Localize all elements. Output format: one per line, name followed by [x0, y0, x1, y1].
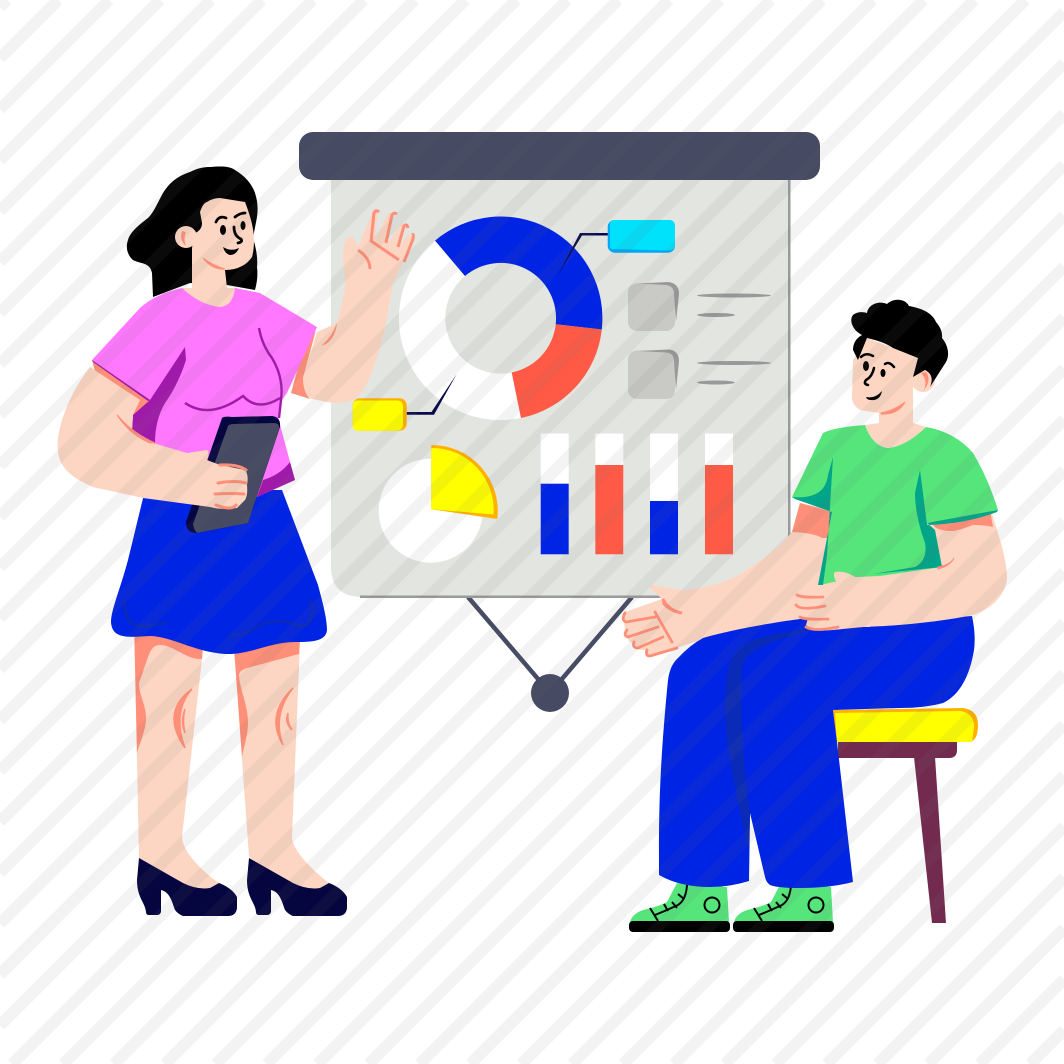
pants fold shading: [725, 630, 810, 850]
donut chart: [399, 217, 602, 420]
legend icon 1: [628, 282, 679, 331]
bar chart: [541, 434, 733, 554]
neck and face: [852, 338, 935, 448]
legs: [134, 620, 329, 892]
board screen: [331, 178, 790, 597]
callout: cyan tag: [557, 220, 675, 276]
tablet: [186, 416, 280, 533]
shoes: [629, 883, 834, 932]
callout: yellow tag: [353, 374, 457, 431]
raised arm and hand: [291, 210, 413, 403]
resting upper arm: [840, 505, 1007, 628]
face and neck: [182, 198, 254, 310]
shirt: [92, 288, 317, 497]
figure: presenter woman: [58, 166, 413, 916]
skirt: [111, 490, 327, 654]
shirt shading: [92, 328, 295, 497]
sleeve shadow on upper arm: [925, 510, 993, 531]
extended arm and hand: [623, 503, 840, 657]
facial features: [861, 354, 894, 400]
stool: [833, 708, 978, 923]
resting hand: [796, 572, 870, 630]
shoes: [137, 858, 347, 916]
board top bar: [299, 132, 820, 180]
skirt folds: [125, 600, 313, 635]
ear: [175, 226, 197, 248]
elbow crease: [938, 558, 954, 569]
hair: [127, 166, 258, 297]
legend icon 2: [628, 350, 679, 399]
hair: [851, 300, 948, 387]
pants: [659, 616, 975, 888]
stool cushion: [833, 708, 978, 742]
torso shirt: [792, 425, 998, 585]
legend lines: [697, 294, 771, 384]
figure: seated man: [623, 300, 1007, 932]
holding arm and hand: [58, 367, 248, 509]
board stand: [468, 597, 632, 712]
pie chart: [379, 445, 498, 563]
panel: presentation board: [299, 132, 820, 712]
